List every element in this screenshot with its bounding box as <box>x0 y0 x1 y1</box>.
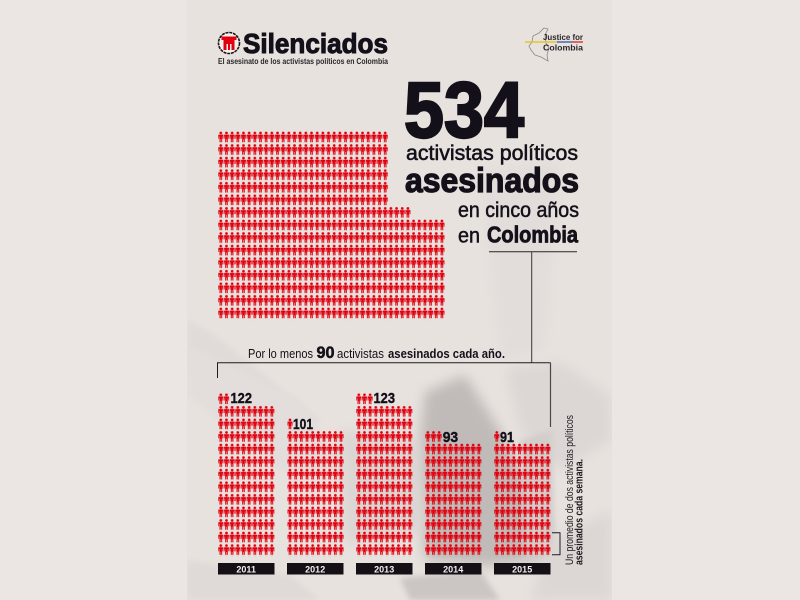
title: Silenciados: Silenciados <box>243 28 388 59</box>
background photo shadows <box>190 340 609 600</box>
caption: at least 90 per year: asesinados cada año. <box>388 347 505 361</box>
caption: at least 90 per year <box>248 343 505 362</box>
caption: at least 90 per year: Por lo menos <box>248 347 313 361</box>
bar: 2015 <box>494 429 551 574</box>
bar: 2014: 93 <box>443 429 458 446</box>
bar: 2012: 2012 <box>305 564 325 574</box>
headline text: en cinco años <box>458 199 579 222</box>
headline text: activistas políticos <box>406 142 578 165</box>
bar: 2011: 122 <box>230 390 252 407</box>
bar: 2015: 2015 <box>512 564 532 574</box>
bar: 2014: 2014 <box>443 564 463 574</box>
logo: Justice for Colombia: Colombia <box>543 42 583 52</box>
headline text <box>405 142 579 248</box>
bar: 2012 <box>287 416 344 574</box>
logo: Silenciados emblem <box>218 32 240 54</box>
bar: 2013: 123 <box>374 390 395 407</box>
pictogram: 534 activists <box>218 132 445 320</box>
rotated note: two activists per week: Un promedio de dos activistas políticos <box>564 415 576 565</box>
connector lines <box>218 252 577 427</box>
bar: 2013: 2013 <box>374 564 394 574</box>
background panel <box>187 0 612 600</box>
headline text: asesinados <box>405 162 579 200</box>
rotated note: two activists per week <box>564 415 586 565</box>
headline number: 534: 534 <box>404 65 524 154</box>
bar: 2013 <box>356 390 413 574</box>
rotated note: two activists per week: asesinados cada semana. <box>574 459 586 565</box>
bar: 2011 <box>218 390 275 574</box>
bar: 2015: 91 <box>500 429 514 446</box>
logo: Justice for Colombia <box>525 28 584 61</box>
bar: 2014 <box>425 429 482 574</box>
bracket: two per week <box>552 533 560 555</box>
caption: at least 90 per year: activistas <box>337 347 384 361</box>
logo: Justice for Colombia: Justice for <box>543 32 584 42</box>
caption: at least 90 per year: 90 <box>316 343 334 362</box>
bar: 2012: 101 <box>293 416 313 433</box>
infographic canvas <box>187 28 612 600</box>
headline text: en <box>458 224 480 248</box>
bar: 2011: 2011 <box>236 564 256 574</box>
subtitle: El asesinato de los activistas políticos en Colombia <box>218 56 388 66</box>
headline text: Colombia <box>487 222 578 248</box>
